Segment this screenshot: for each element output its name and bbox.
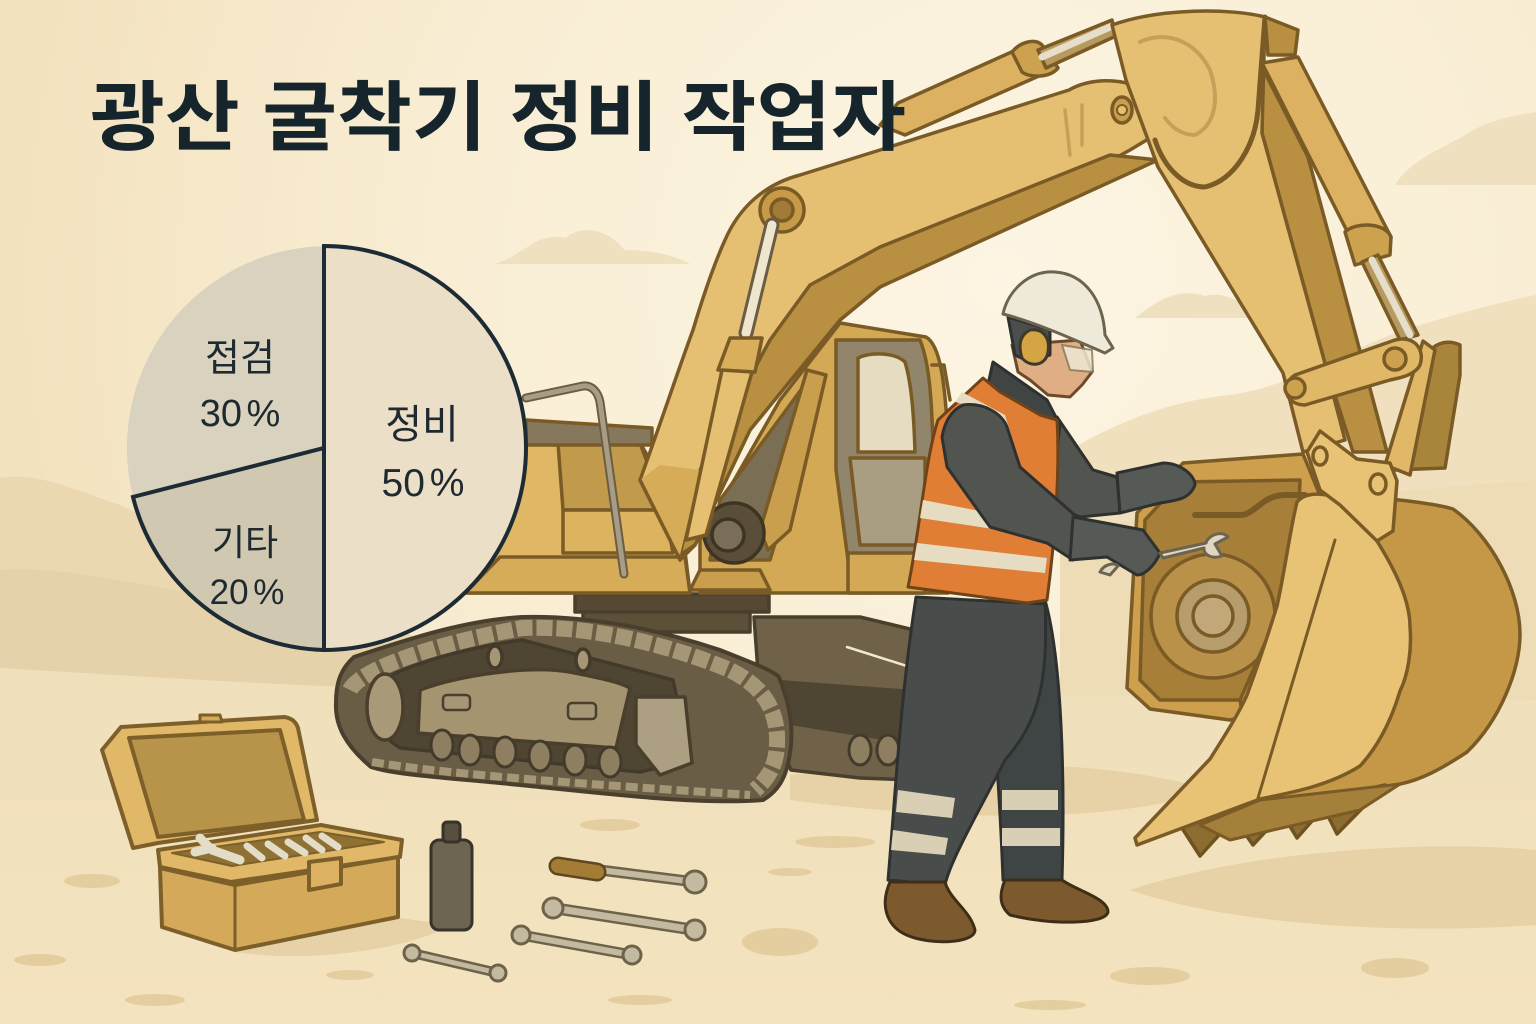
worker (885, 272, 1228, 942)
pie label: 접검: 접검 (205, 338, 275, 380)
bucket teeth (1180, 785, 1385, 856)
pie slice: 기타 20% (133, 448, 324, 650)
head cap (1008, 317, 1050, 362)
cab strut (760, 370, 826, 550)
pie label: 정비: 정비 (385, 403, 459, 447)
front leg (888, 597, 1046, 885)
near arm (942, 405, 1077, 560)
toolbox latch (309, 858, 341, 890)
engine handrail (526, 386, 624, 574)
title: 광산 굴착기 정비 작업자 (90, 76, 906, 161)
hard hat (1003, 272, 1113, 353)
excavator (336, 11, 1520, 856)
near cuff and glove (1070, 517, 1160, 575)
background: distant clouds and dust (495, 112, 1536, 318)
rear engine block behind bucket (1127, 454, 1330, 720)
top cylinder (880, 20, 1116, 135)
pie chart (127, 246, 526, 650)
pie value: 20%: 20 % (210, 573, 284, 612)
wrench 2 (512, 926, 641, 964)
grille (526, 420, 652, 445)
wrench 1 (543, 898, 705, 940)
undercarriage platform (575, 594, 769, 632)
toolbox (102, 715, 402, 950)
wrench 3 (404, 945, 506, 981)
hand tools on the ground (404, 866, 706, 981)
track (336, 617, 791, 801)
bucket side plate (1135, 494, 1411, 845)
toolbox body (160, 857, 398, 950)
far track (754, 617, 914, 780)
far glove (1117, 463, 1195, 513)
pie label: 기타: 기타 (212, 522, 278, 563)
pie value: 50%: 50 % (382, 462, 464, 505)
background: hills (0, 295, 1536, 720)
boom cylinder (686, 225, 772, 540)
neck and face (1012, 340, 1092, 397)
arm cylinder (1262, 57, 1418, 340)
rear leg (985, 600, 1063, 880)
boots (885, 882, 975, 942)
boom (640, 81, 1158, 560)
shirt collar and torso (980, 362, 1060, 510)
screwdriver (558, 866, 706, 893)
toolbox interior (172, 832, 384, 866)
bucket lip (1200, 784, 1400, 840)
bucket back (1240, 495, 1520, 810)
wrench in hand (1100, 534, 1228, 575)
toolbox rim (158, 825, 402, 882)
ear muff (1020, 330, 1048, 364)
vest (908, 378, 1058, 603)
vest stripes (914, 392, 1047, 573)
ground speckles (14, 819, 1429, 1010)
pie value: 30%: 30 % (200, 393, 280, 435)
swing mechanism (690, 503, 770, 590)
far arm (1057, 417, 1120, 517)
body (465, 443, 690, 593)
ground shadows (235, 764, 1536, 956)
cab (700, 323, 950, 593)
toolbox lid (102, 717, 317, 848)
arm strip (1262, 67, 1387, 452)
safety glasses (1062, 345, 1093, 372)
pie slice: 정비 50% (324, 246, 526, 650)
dark wedge under boom (710, 387, 803, 560)
linkage (1285, 339, 1460, 541)
arm (1112, 11, 1345, 452)
pie slice: 접검 30% (127, 246, 324, 497)
bottle (431, 822, 472, 930)
tools inside (195, 836, 338, 860)
reflective leg bands (896, 790, 955, 818)
background: ground (0, 668, 1536, 1024)
